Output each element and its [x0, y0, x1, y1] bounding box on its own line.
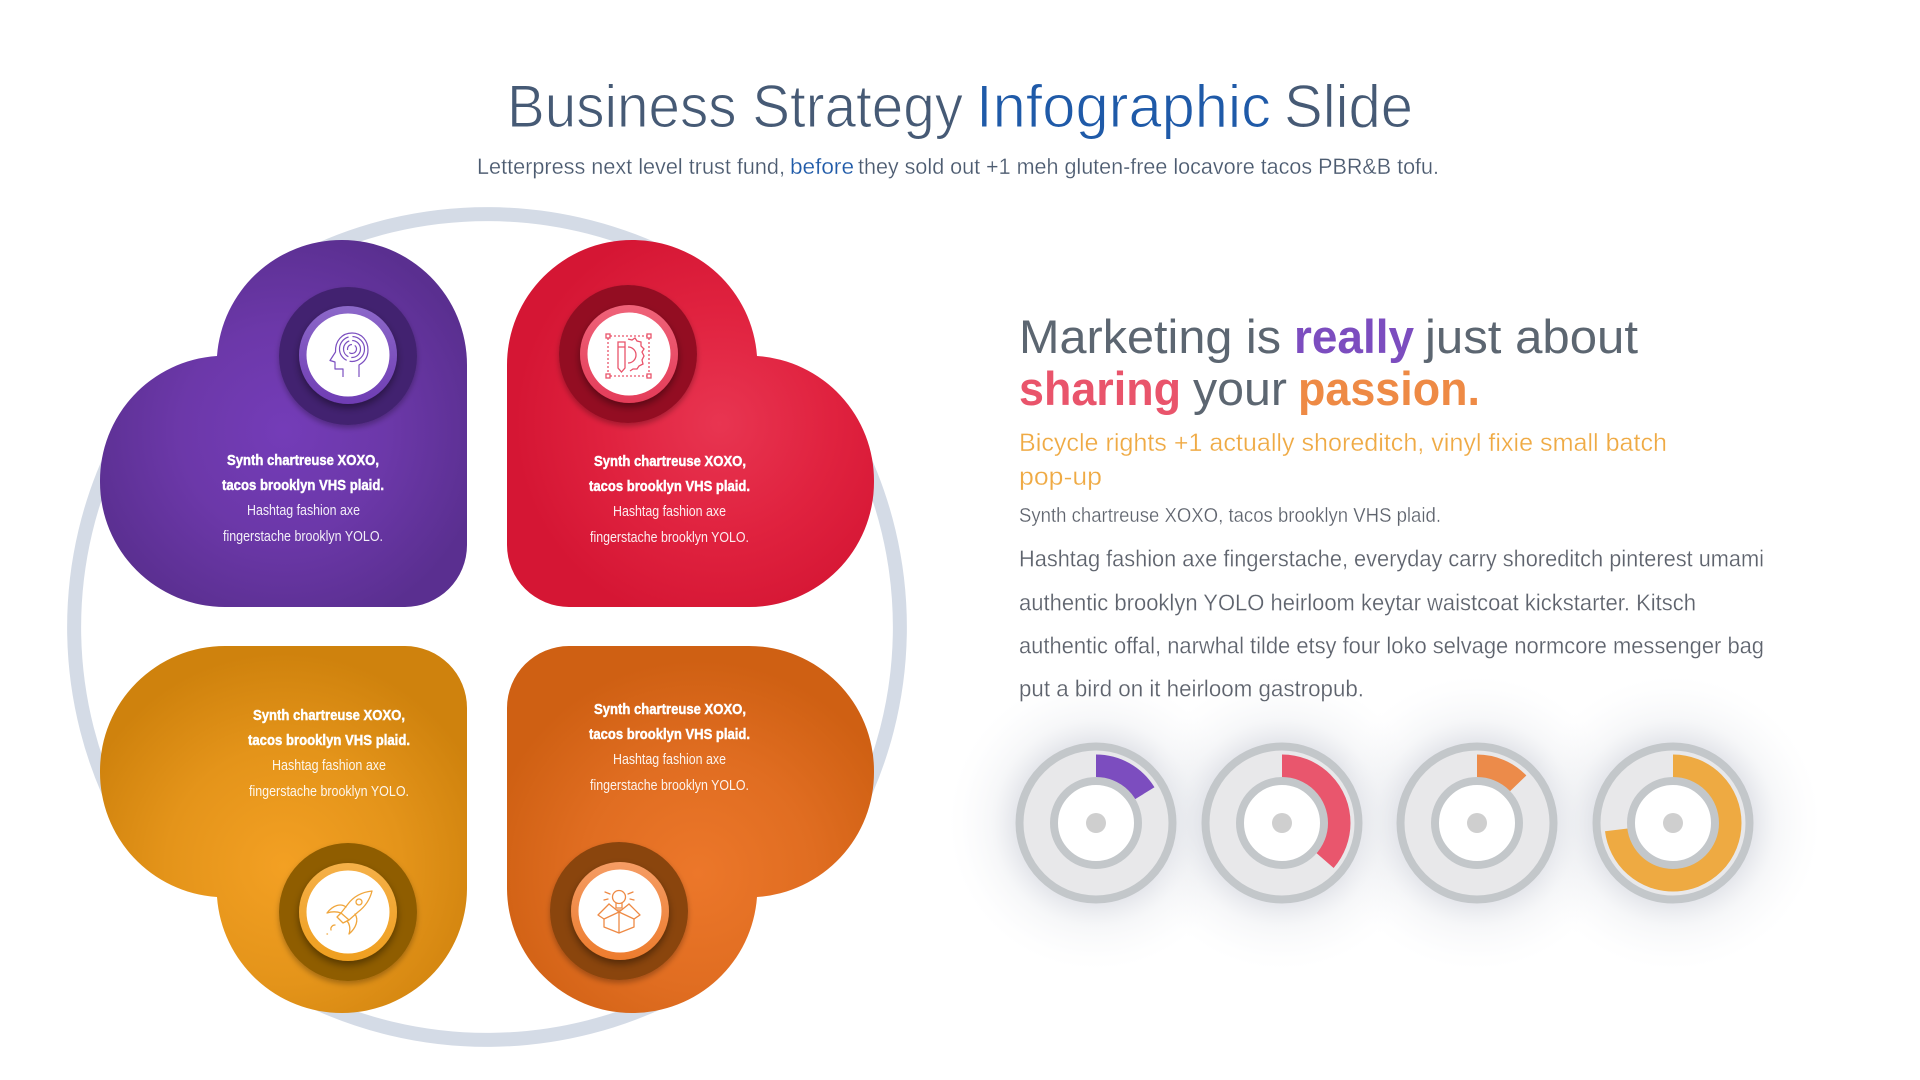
heading	[1019, 310, 1638, 415]
subtitle: before	[790, 154, 854, 179]
heading: your	[1193, 362, 1287, 415]
panel: purple heart	[100, 240, 467, 607]
subtitle: they sold out +1 meh gluten-free locavore tacos PBR&B tofu.	[858, 154, 1439, 179]
donut chart: yellow	[1596, 746, 1750, 900]
orange subheading: Bicycle rights +1 actually shoreditch, vinyl fixie small batch	[1019, 429, 1667, 457]
heading: Marketing is	[1019, 310, 1281, 363]
heading: just about	[1423, 310, 1638, 363]
donut chart: orange	[1400, 746, 1554, 900]
text: orange panel: tacos brooklyn VHS plaid.	[589, 726, 750, 743]
text: orange panel: Hashtag fashion axe	[613, 751, 726, 768]
text: orange panel: fingerstache brooklyn YOLO.	[590, 777, 749, 794]
title	[507, 73, 1413, 140]
text: purple panel: tacos brooklyn VHS plaid.	[222, 477, 384, 494]
halos behind donuts	[948, 675, 1821, 971]
text: yellow panel: fingerstache brooklyn YOLO.	[249, 783, 409, 800]
heading: really	[1294, 310, 1414, 363]
panel: orange heart	[507, 646, 874, 1013]
text: purple panel: fingerstache brooklyn YOLO.	[223, 528, 383, 545]
text: body paragraph: authentic brooklyn YOLO heirloom keytar waistcoat kickstarter. Kitsch	[1019, 590, 1696, 616]
text: body paragraph	[1019, 546, 1764, 702]
orange subheading	[1019, 429, 1667, 491]
text: purple panel: Synth chartreuse XOXO,	[227, 452, 379, 469]
text: red panel: fingerstache brooklyn YOLO.	[590, 529, 749, 546]
title: Slide	[1284, 73, 1413, 140]
text: red panel: Synth chartreuse XOXO,	[594, 453, 746, 470]
donut chart: red	[1206, 746, 1358, 900]
text: orange panel	[589, 701, 750, 794]
text: body paragraph: put a bird on it heirloom gastropub.	[1019, 676, 1364, 702]
text: red panel: Hashtag fashion axe	[613, 503, 726, 520]
orange subheading: pop-up	[1019, 463, 1102, 491]
heading: passion.	[1298, 362, 1480, 415]
title: Infographic	[976, 73, 1271, 140]
text: orange panel: Synth chartreuse XOXO,	[594, 701, 746, 718]
text: yellow panel: tacos brooklyn VHS plaid.	[248, 732, 410, 749]
icon: pencil and gear	[606, 334, 651, 378]
text: purple panel: Hashtag fashion axe	[247, 502, 360, 519]
text: purple panel	[222, 452, 384, 545]
title: Business Strategy	[507, 73, 963, 140]
text: body paragraph: Hashtag fashion axe fingerstache, everyday carry shoreditch pinterest umami	[1019, 546, 1764, 572]
subtitle	[477, 154, 1439, 179]
text: body paragraph: authentic offal, narwhal tilde etsy four loko selvage normcore messenger bag	[1019, 632, 1764, 658]
panel: yellow heart	[100, 646, 467, 1013]
heading: sharing	[1019, 362, 1181, 415]
text: red panel: tacos brooklyn VHS plaid.	[589, 478, 750, 495]
icon: rocket	[327, 891, 372, 934]
background ring arcs	[74, 214, 900, 1040]
text: short description: Synth chartreuse XOXO, tacos brooklyn VHS plaid.	[1019, 505, 1441, 527]
text: yellow panel: Hashtag fashion axe	[272, 757, 386, 774]
icon: box with light bulb	[598, 890, 640, 933]
text: yellow panel	[248, 707, 410, 800]
icon: head with maze	[330, 333, 368, 377]
subtitle: Letterpress next level trust fund,	[477, 154, 785, 179]
panel: red heart	[507, 240, 874, 607]
text: red panel	[589, 453, 750, 546]
text: yellow panel: Synth chartreuse XOXO,	[253, 707, 405, 724]
donut chart: purple	[1020, 746, 1172, 900]
